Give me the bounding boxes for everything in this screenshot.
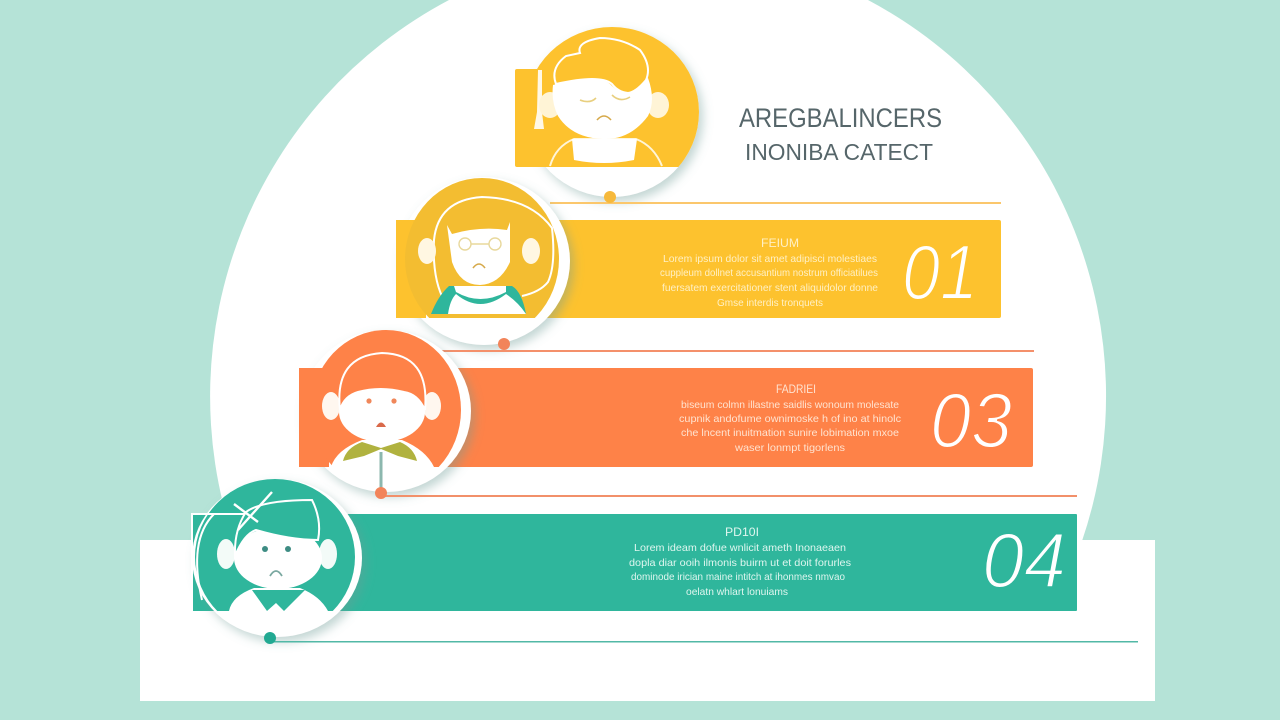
bar [192, 514, 1077, 611]
icon: child with collar [322, 353, 441, 490]
label and text: Gmse interdis tronquets [717, 297, 823, 309]
connector line 3 [381, 495, 1077, 497]
connector dot 3 [375, 487, 387, 499]
step 4: teal bar [192, 514, 1077, 611]
number 04: 04 [982, 516, 1066, 604]
bar [396, 220, 1001, 318]
label and text: FEIUM [761, 236, 799, 250]
connector dot 4 [264, 632, 276, 644]
step 3: avatar [299, 330, 471, 492]
step 3: orange bar [299, 368, 1033, 467]
label and text: dominode irician maine intitch at ihonmes nmvao [631, 571, 845, 583]
title [739, 103, 942, 165]
teal disc [195, 479, 355, 611]
yellow disc [396, 178, 559, 318]
label and text [629, 525, 851, 598]
frame stroke [192, 514, 250, 611]
avatar disc [525, 27, 699, 197]
avatar disc [301, 330, 471, 492]
step 1: yellow avatar [515, 27, 699, 197]
orange disc [299, 330, 461, 467]
connector line 1 [550, 202, 1001, 204]
label and text: che lncent inuitmation sunire lobimation mxoe [681, 427, 899, 439]
step 2: yellow bar [396, 220, 1001, 318]
number 01: 01 [902, 228, 978, 316]
title: INONIBA CATECT [745, 139, 933, 165]
step 4: avatar [192, 479, 362, 637]
label and text: FADRIEI [776, 382, 816, 396]
connector line 2 [440, 350, 1034, 352]
connector dot 2 [498, 338, 510, 350]
avatar disc [192, 479, 362, 637]
label and text: fuersatem exercitationer stent aliquidolor donne [662, 282, 878, 294]
number 03: 03 [930, 376, 1012, 464]
white semicircle backdrop [210, 0, 1106, 541]
icon: tie [380, 452, 382, 490]
icon: child with tie [217, 492, 337, 611]
yellow tab and disc [515, 27, 699, 167]
label and text [660, 236, 878, 309]
avatar disc [398, 177, 570, 345]
label and text: PD10I [725, 525, 759, 539]
bar [299, 368, 1033, 467]
icon: child with glasses [418, 197, 553, 314]
white base panel [140, 540, 1155, 701]
label and text: biseum colmn illastne saidlis wonoum molesate [681, 399, 899, 411]
label and text: waser lonmpt tigorlens [734, 442, 845, 454]
label and text: cuppleum dollnet accusantium nostrum officiatilues [660, 267, 878, 279]
label and text: dopla diar ooih ilmonis buirm ut et doit forurles [629, 557, 851, 569]
label and text: Lorem ideam dofue wnlicit ameth Inonaeaen [634, 542, 846, 554]
label and text [679, 382, 901, 454]
icon: sparkle [234, 492, 272, 530]
title: AREGBALINCERS [739, 103, 942, 133]
connector line 4 [270, 641, 1138, 642]
step 2: avatar [396, 177, 570, 345]
label and text: oelatn whlart lonuiams [686, 586, 788, 598]
connector dot 1 [604, 191, 616, 203]
icon: tassel [534, 70, 544, 129]
label and text: Lorem ipsum dolor sit amet adipisci molestiaes [663, 253, 877, 265]
icon: sad child face [539, 38, 669, 166]
label and text: cupnik andofume ownimoske h of ino at hinolc [679, 413, 901, 425]
